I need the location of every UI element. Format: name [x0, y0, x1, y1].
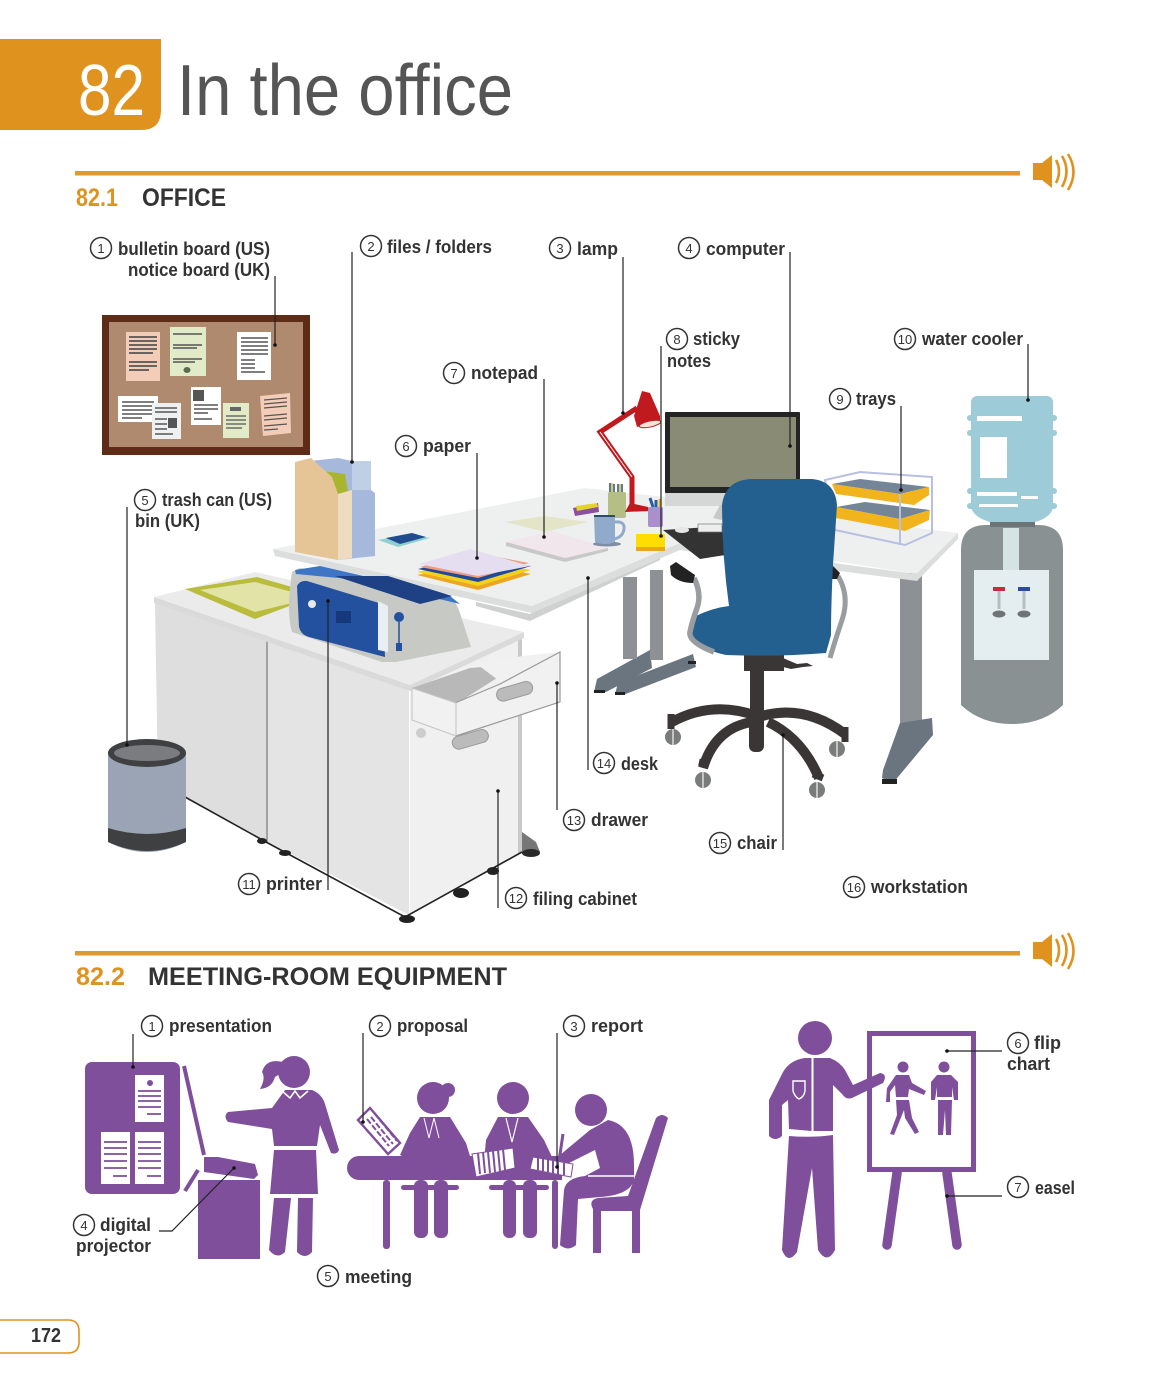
illustration: book on desk: [378, 533, 430, 547]
label: trash can / bin: 5: [141, 493, 149, 508]
section heading: 82.2 meeting-room equipment: MEETING-ROOM EQUIPMENT: [148, 963, 507, 991]
illustration: trays: [825, 472, 932, 545]
desk top: [273, 488, 958, 606]
illustration: meeting table with people: [347, 1082, 668, 1253]
leader dot: presentation: [131, 1065, 135, 1069]
label: digital projector: [74, 1214, 151, 1256]
label: trays: 9: [836, 392, 844, 407]
leader dot: files: [350, 460, 354, 464]
desk edge: [273, 533, 958, 613]
note grey: [152, 403, 181, 439]
document top: [135, 1075, 164, 1122]
label: bulletin board: notice board (UK): [128, 259, 270, 280]
illustration: flip chart: [870, 1034, 974, 1170]
label: report: [564, 1015, 643, 1036]
leader dot: paper: [475, 556, 479, 560]
note green: [170, 327, 206, 376]
label: lamp: [550, 238, 618, 259]
person 3: [558, 1094, 634, 1248]
illustration: drawer: [412, 652, 560, 736]
illustration: presenter man: [769, 1021, 885, 1258]
cabinet centre panel: [268, 637, 409, 915]
label: notepad: 7: [450, 366, 458, 381]
illustration: projector table: [198, 1180, 260, 1259]
label: easel: 7: [1014, 1180, 1022, 1195]
water bottle: [967, 396, 1057, 522]
leader: trash can: [126, 507, 128, 745]
leader dot: lamp: [621, 411, 625, 415]
illustration: paper stack: [417, 549, 531, 590]
illustration: trash can: [108, 739, 186, 852]
illustration: computer: [665, 412, 800, 533]
document lower left: [101, 1132, 130, 1184]
cabinet edge bottom: [185, 797, 522, 917]
note white 2: [118, 396, 158, 422]
label: sticky notes: notes: [667, 350, 711, 371]
label: water cooler: water cooler: [921, 328, 1023, 349]
section heading: 82.2 meeting-room equipment: 82.2: [76, 963, 125, 991]
small figure right: [931, 1062, 958, 1135]
label: presentation: 1: [148, 1019, 156, 1034]
label: digital projector: digital: [100, 1214, 151, 1235]
leader dot: flip chart: [945, 1049, 949, 1053]
label: bulletin board: [90, 238, 270, 280]
illustration: easel legs: [887, 1173, 957, 1245]
label: drawer: 13: [567, 813, 581, 828]
illustration: report papers: [472, 1148, 573, 1177]
label: trash can / bin: [134, 489, 272, 531]
label: chair: [710, 832, 777, 854]
label: water cooler: 10: [898, 332, 912, 347]
label: proposal: proposal: [397, 1015, 468, 1036]
man left half: [769, 1058, 812, 1139]
illustration: sticky packs: [573, 503, 599, 516]
person 1: [400, 1082, 470, 1160]
leader dot: notepad: [542, 535, 546, 539]
icon: audio speaker 1: [1033, 154, 1074, 190]
illustration: pen cup green: [608, 483, 626, 518]
label: files / folders: 2: [367, 239, 375, 254]
leader dot: report: [555, 1165, 559, 1169]
chair right arm: [825, 566, 845, 658]
leader: computer: [789, 252, 791, 446]
illustration: filing cabinet: [154, 572, 540, 923]
cabinet front panel: [410, 638, 522, 914]
illustration: sticky notes: [636, 534, 665, 551]
leader: filing cabinet: [497, 791, 499, 908]
keyboard tray: [663, 526, 725, 559]
leader: digital projector: [159, 1168, 234, 1231]
cabinet divider: [266, 634, 268, 843]
label: sticky notes: sticky: [693, 328, 741, 349]
illustration: bulletin board: [102, 315, 310, 455]
man trousers: [782, 1135, 835, 1258]
leader dot: trays: [899, 488, 903, 492]
table legs: [383, 1180, 558, 1249]
illustration: green pad: [505, 516, 588, 532]
illustration: pen cup purple: [648, 498, 663, 527]
label: desk: desk: [621, 753, 659, 774]
label: chair: 15: [713, 836, 727, 851]
label: easel: easel: [1035, 1177, 1075, 1198]
illustration: desk: [273, 488, 958, 784]
man right half: [814, 1058, 885, 1131]
label: proposal: 2: [376, 1019, 384, 1034]
leader: files: [351, 252, 353, 462]
table: [347, 1156, 562, 1180]
label: trash can / bin: trash can (US): [162, 489, 272, 510]
cabinet feet: [257, 838, 499, 923]
label: drawer: drawer: [591, 809, 648, 830]
desk foot behind cabinet: [522, 832, 540, 857]
leader dot: digital projector: [232, 1166, 236, 1170]
leader: presentation: [132, 1034, 134, 1067]
section heading: 82.1 office: OFFICE: [142, 184, 226, 212]
desk legs left: [623, 570, 663, 660]
chapter number tab: [0, 39, 161, 131]
chair wheels: [665, 729, 845, 798]
label: sticky notes: [666, 328, 741, 371]
illustration: digital projector: [204, 1157, 258, 1179]
note green 2: [223, 403, 249, 438]
illustration: water cooler: [961, 396, 1063, 724]
leader: flip chart: [947, 1050, 1002, 1052]
label: flip chart: [1007, 1032, 1061, 1074]
leader dot: sticky notes: [659, 534, 663, 538]
cabinet lock and handle: [416, 728, 490, 751]
section heading: 82.1 office: 82.1: [76, 184, 118, 212]
label: lamp: 3: [556, 241, 564, 256]
seated legs: [401, 1180, 549, 1238]
cabinet top: [154, 572, 524, 685]
leader: chair: [782, 735, 784, 850]
illustration: projector stand: [184, 1066, 204, 1191]
illustration: printer: [289, 566, 471, 662]
label: desk: 14: [597, 756, 611, 771]
label: flip chart: 6: [1014, 1036, 1022, 1051]
desk leg right: [882, 573, 933, 784]
label: presentation: presentation: [169, 1015, 272, 1036]
page number: 172: [31, 1325, 61, 1347]
label: bulletin board: bulletin board (US): [118, 238, 270, 259]
illustration: chair: [665, 479, 845, 798]
icon: audio speaker 2: [1033, 933, 1074, 969]
note white 3: [191, 387, 221, 425]
section heading: 82.2 meeting-room equipment: [75, 951, 1020, 991]
leader dot: printer: [326, 599, 330, 603]
label: digital projector: 4: [80, 1218, 88, 1233]
label: trash can / bin: bin (UK): [135, 510, 200, 531]
illustration: tray on cabinet: [185, 577, 292, 619]
label: flip chart: chart: [1007, 1053, 1050, 1074]
person 2: [484, 1082, 552, 1161]
leader: printer: [327, 601, 329, 890]
label: desk: [594, 752, 659, 774]
label: paper: paper: [423, 435, 471, 456]
leader: lamp: [622, 257, 624, 413]
leader: paper: [476, 453, 478, 558]
label: report: report: [591, 1015, 643, 1036]
desk underside: [476, 545, 660, 621]
label: paper: 6: [402, 439, 410, 454]
woman skirt: [270, 1150, 318, 1194]
chair back and seat: [690, 479, 837, 656]
label: meeting: meeting: [345, 1266, 412, 1287]
label: printer: [238, 873, 322, 894]
leader: trays: [900, 406, 902, 490]
page number: [0, 1320, 79, 1353]
leader: notepad: [543, 379, 545, 537]
label: computer: 4: [685, 241, 693, 256]
illustration: proposal document: [358, 1108, 400, 1154]
leader: proposal: [362, 1033, 364, 1122]
label: proposal: [370, 1015, 468, 1036]
label: drawer: [564, 809, 648, 830]
note white: [237, 332, 271, 380]
desk feet left: [594, 650, 696, 695]
label: report: 3: [570, 1019, 578, 1034]
label: files / folders: files / folders: [387, 236, 492, 257]
label: computer: computer: [706, 238, 785, 259]
label: filing cabinet: filing cabinet: [533, 888, 637, 909]
chapter number tab: 82: [78, 51, 145, 131]
leader dot: desk: [586, 576, 590, 580]
leader: water cooler: [1027, 344, 1029, 400]
illustration: presentation board: [85, 1062, 180, 1194]
illustration: mug: [593, 515, 624, 546]
label: workstation: 16: [847, 880, 861, 895]
chair base: [671, 709, 845, 778]
woman torso: [226, 1090, 339, 1154]
label: printer: 11: [242, 877, 256, 892]
cabinet left panel: [155, 603, 266, 842]
label: chair: chair: [737, 832, 777, 853]
leader: sticky notes: [660, 346, 662, 536]
label: computer: [678, 238, 785, 259]
note pink 2: [260, 393, 291, 436]
illustration: presenter woman: [226, 1056, 339, 1256]
label: meeting: [318, 1266, 412, 1287]
chair: [591, 1115, 668, 1253]
leader dot: water cooler: [1026, 398, 1030, 402]
leader dot: filing cabinet: [496, 789, 500, 793]
leader: report: [556, 1033, 558, 1167]
label: sticky notes: 8: [673, 332, 681, 347]
leader dot: chair: [781, 733, 785, 737]
label: paper: [396, 435, 471, 456]
leader dot: drawer: [555, 681, 559, 685]
leader dot: trash can: [125, 743, 129, 747]
chair left arm: [670, 562, 714, 652]
leader dot: proposal: [361, 1120, 365, 1124]
illustration: lamp: [600, 391, 661, 512]
leader: bulletin board: [274, 276, 276, 345]
document lower right: [135, 1132, 164, 1184]
leader: drawer: [556, 683, 558, 810]
leader: desk: [587, 578, 589, 770]
label: notepad: notepad: [471, 362, 538, 383]
woman legs: [269, 1198, 291, 1256]
leader dot: easel: [945, 1194, 949, 1198]
small figure left: [886, 1062, 926, 1135]
label: trays: [830, 388, 896, 410]
illustration: files and folders: [295, 458, 375, 560]
label: printer: printer: [266, 873, 322, 894]
label: filing cabinet: 12: [509, 891, 523, 906]
leader dot: computer: [788, 444, 792, 448]
title: In the office: [177, 51, 513, 131]
label: digital projector: projector: [76, 1235, 151, 1256]
label: meeting: 5: [324, 1269, 332, 1284]
label: trays: trays: [856, 388, 896, 409]
label: lamp: lamp: [577, 238, 618, 259]
label: workstation: workstation: [870, 876, 968, 897]
note pink: [126, 332, 160, 381]
leader dot: bulletin board: [273, 343, 277, 347]
label: easel: [1008, 1176, 1075, 1198]
illustration: notepad: [506, 531, 608, 562]
label: bulletin board: 1: [97, 241, 105, 256]
label: flip chart: flip: [1034, 1032, 1061, 1053]
leader: easel: [947, 1195, 1002, 1197]
label: notepad: [444, 362, 538, 384]
section heading: 82.1 office: [75, 171, 1020, 212]
